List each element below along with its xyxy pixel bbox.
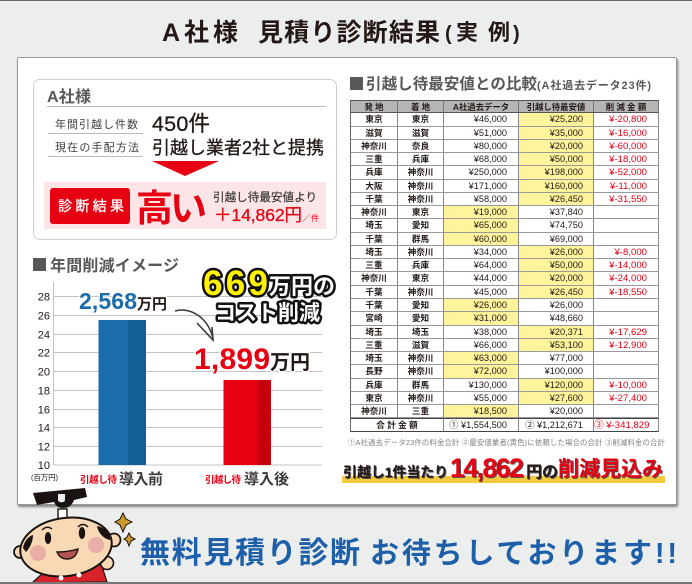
comparison table: ¥26,450 xyxy=(550,287,583,297)
comparison table: ¥66,000 xyxy=(474,340,507,350)
comparison table xyxy=(350,100,658,432)
comparison table: 千葉 xyxy=(365,300,383,310)
callout: cost reduction: コスト削減 xyxy=(215,301,320,325)
panel: A社様 client summary xyxy=(33,79,337,240)
savings per case headline: 円の xyxy=(526,464,558,481)
comparison table: 千葉 xyxy=(365,194,383,204)
title: ( xyxy=(445,23,452,45)
comparison table: ¥26,000 xyxy=(550,247,583,257)
comparison table: ¥198,000 xyxy=(545,167,583,177)
comparison table: ¥-11,000 xyxy=(610,181,647,192)
comparison table: 合 計 金 額 xyxy=(376,420,418,430)
comparison table: ¥38,000 xyxy=(474,327,507,337)
savings per case headline: 削減見込み xyxy=(558,457,663,481)
x label: before: 引越し待 xyxy=(80,474,117,486)
comparison table: ¥26,000 xyxy=(550,300,583,310)
comparison table: ¥-18,000 xyxy=(609,154,647,165)
callout: cost reduction xyxy=(203,264,335,325)
comparison table: 滋賀 xyxy=(412,128,429,138)
comparison table: ③ ¥-341,829 xyxy=(594,420,649,431)
comparison table: 千葉 xyxy=(365,287,383,297)
comparison table: ¥35,000 xyxy=(550,128,583,138)
comparison table: ¥44,000 xyxy=(474,273,507,283)
axis unit: (百万円) xyxy=(31,473,58,482)
comparison table: 三重 xyxy=(365,154,383,164)
comparison table: ¥77,000 xyxy=(550,353,583,363)
comparison table: ¥250,000 xyxy=(469,167,507,177)
comparison table: 神奈川 xyxy=(361,273,387,283)
comparison table: ¥60,000 xyxy=(474,234,507,244)
comparison table: ¥-20,800 xyxy=(609,114,647,125)
heading: comparison: 引越し待最安値との比較 xyxy=(366,74,537,93)
comparison table: 引越し待最安値 xyxy=(527,102,585,112)
comparison table: ¥74,750 xyxy=(550,220,583,230)
label: before amount xyxy=(79,288,167,314)
result badge: 診断結果 xyxy=(58,198,124,214)
comparison table: 神奈川 xyxy=(408,366,433,376)
per case unit: ／件 xyxy=(302,213,319,223)
comparison table: 神奈川 xyxy=(408,167,433,177)
comparison table: 神奈川 xyxy=(361,141,387,151)
comparison table: 神奈川 xyxy=(361,406,387,416)
comparison table: 埼玉 xyxy=(365,220,383,230)
comparison table: ¥46,000 xyxy=(474,114,507,124)
comparison table: ¥50,000 xyxy=(550,154,583,164)
callout: cost reduction: 万円の xyxy=(269,274,335,299)
comparison table: 群馬 xyxy=(412,380,429,390)
comparison table: 東京 xyxy=(412,207,429,217)
y axis labels: 26 xyxy=(38,310,50,322)
comparison table: 愛知 xyxy=(412,220,429,230)
top edge line xyxy=(0,0,692,1)
comparison table: ¥51,000 xyxy=(474,128,507,138)
result band xyxy=(44,182,326,229)
comparison table: ¥64,000 xyxy=(474,260,507,270)
comparison table: ¥160,000 xyxy=(545,181,583,191)
comparison table: 千葉 xyxy=(365,234,383,244)
comparison table: ¥34,000 xyxy=(474,247,507,257)
comparison table: ② ¥1,212,671 xyxy=(525,420,583,430)
savings per case headline: 14,862 xyxy=(450,453,524,483)
comparison table: 愛知 xyxy=(412,300,429,310)
x label: after: 導入後 xyxy=(244,470,289,488)
comparison table: 兵庫 xyxy=(412,154,429,164)
comparison table: 愛知 xyxy=(412,313,429,323)
comparison table: 三重 xyxy=(365,260,383,270)
comparison table: 削 減 金 額 xyxy=(606,102,646,112)
arrangement method label: 現在の手配方法 xyxy=(55,140,139,154)
y axis labels: 28 xyxy=(38,292,50,304)
comparison table: ¥27,600 xyxy=(550,393,583,403)
bottom call to action: 無料見積り診断 xyxy=(140,537,360,570)
comparison table: ① ¥1,554,500 xyxy=(449,420,507,430)
comparison table: ¥18,500 xyxy=(474,406,507,416)
result word: 高い: 高い xyxy=(136,188,207,229)
y axis labels: 24 xyxy=(38,330,50,342)
arrow: reduction xyxy=(175,310,213,340)
arrow: down to result xyxy=(152,161,219,176)
comparison table: ¥65,000 xyxy=(474,220,507,230)
comparison table: ¥-17,629 xyxy=(609,327,647,338)
comparison table: ¥55,000 xyxy=(474,393,507,403)
comparison table: A社過去データ xyxy=(453,102,509,112)
bottom call to action: お待ちしております!! xyxy=(370,537,677,570)
comparison table: ¥37,840 xyxy=(550,207,583,217)
comparison table: ¥-8,000 xyxy=(614,247,647,258)
comparison table: 埼玉 xyxy=(365,327,383,337)
y axis labels: 20 xyxy=(38,366,50,378)
y axis labels: 14 xyxy=(38,422,50,434)
label: before amount: 万円 xyxy=(137,296,167,313)
comparison table: ¥20,000 xyxy=(550,273,583,283)
comparison table: 三重 xyxy=(412,406,429,416)
comparison table: 奈良 xyxy=(412,141,429,151)
y axis labels xyxy=(38,292,50,472)
comparison table: ¥-16,000 xyxy=(609,128,647,139)
comparison table: 発 地 xyxy=(364,102,384,112)
annual moves value: 450件 xyxy=(152,112,210,136)
comparison table: ¥69,000 xyxy=(550,234,583,244)
comparison table: ¥72,000 xyxy=(474,366,507,376)
comparison table: ¥-10,000 xyxy=(609,380,647,391)
comparison table: ¥-18,550 xyxy=(609,287,647,298)
x label: before xyxy=(80,470,163,488)
comparison table: ¥58,000 xyxy=(474,194,507,204)
title: A社様 xyxy=(162,19,238,47)
y axis labels: 18 xyxy=(38,386,50,398)
comparison table: 神奈川 xyxy=(408,353,433,363)
arrangement method value: 引越し業者2社と提携 xyxy=(152,138,324,158)
comparison table: 神奈川 xyxy=(408,194,433,204)
comparison table: ¥20,000 xyxy=(550,141,583,151)
y axis labels: 16 xyxy=(38,404,50,416)
label: after amount: 万円 xyxy=(270,352,310,374)
comparison table: 東京 xyxy=(365,393,383,403)
comparison table: 兵庫 xyxy=(412,260,429,270)
comparison table: ¥120,000 xyxy=(545,380,583,390)
comparison table: ¥45,000 xyxy=(474,287,507,297)
comparison table: ¥63,000 xyxy=(474,353,507,363)
comparison table: ¥-60,000 xyxy=(609,141,647,152)
y axis labels: 12 xyxy=(38,442,50,454)
label: after amount: 1,899 xyxy=(194,343,270,376)
label: before amount: 2,568 xyxy=(79,288,137,314)
comparison table: 埼玉 xyxy=(365,353,383,363)
comparison table: 三重 xyxy=(365,340,383,350)
comparison table: ¥53,100 xyxy=(550,340,583,350)
panel: main white card xyxy=(17,57,677,505)
x label: after xyxy=(205,470,289,488)
comparison table: 群馬 xyxy=(412,234,429,244)
title: 実例 xyxy=(456,20,510,45)
comparison table: 神奈川 xyxy=(408,287,433,297)
y axis labels: 22 xyxy=(38,348,50,360)
comparison table: ¥20,371 xyxy=(550,327,583,337)
comparison table: ¥-12,900 xyxy=(609,340,647,351)
comparison table: ¥26,450 xyxy=(550,194,583,204)
comparison table: ¥25,200 xyxy=(550,114,583,124)
client name heading: A社様 xyxy=(47,87,91,106)
comparison table: 東京 xyxy=(412,273,429,283)
comparison table: ¥26,000 xyxy=(474,300,507,310)
comparison table: ¥50,000 xyxy=(550,260,583,270)
bar: after xyxy=(224,380,271,465)
comparison table: ¥-14,000 xyxy=(609,260,647,271)
comparison table: ¥19,000 xyxy=(474,207,507,217)
comparison table: 神奈川 xyxy=(408,393,433,403)
comparison table: ¥-31,550 xyxy=(609,194,647,205)
comparison table: ¥100,000 xyxy=(545,366,583,376)
label: after amount xyxy=(194,343,310,376)
comparison table: 宮崎 xyxy=(365,313,383,323)
bottom edge line xyxy=(0,582,692,584)
comparison table: 神奈川 xyxy=(361,207,387,217)
comparison table: 長野 xyxy=(365,366,383,376)
comparison table: 東京 xyxy=(412,114,429,124)
x label: before: 導入前 xyxy=(119,470,163,488)
comparison table: ¥171,000 xyxy=(469,181,507,191)
comparison table: ¥-24,000 xyxy=(609,273,647,284)
comparison table: 埼玉 xyxy=(365,247,383,257)
comparison table: 神奈川 xyxy=(408,247,433,257)
comparison table: ¥-27,400 xyxy=(609,393,647,404)
price difference: ＋14,862円 xyxy=(214,205,302,225)
annual moves label: 年間引越し件数 xyxy=(55,117,138,131)
table footnote: ①A社過去データ23件の料金合計 ②最安値業者(黄色)に依頼した場合の合計 ③削減料金の合計 xyxy=(348,438,666,447)
comparison table: 滋賀 xyxy=(412,340,429,350)
comparison table: 神奈川 xyxy=(408,181,433,191)
callout: cost reduction: 669 xyxy=(203,264,268,303)
y axis labels: 10 xyxy=(38,460,50,472)
comparison table: ¥31,000 xyxy=(474,313,507,323)
comparison table: 着 地 xyxy=(411,102,430,112)
title: 見積り診断結果 xyxy=(258,19,440,47)
comparison caption: 引越し待最安値より xyxy=(213,190,317,204)
heading: comparison: (A社過去データ23件) xyxy=(537,78,651,92)
comparison table: ¥68,000 xyxy=(474,154,507,164)
savings per case headline: 引越し1件当たり xyxy=(343,464,448,480)
title: ) xyxy=(513,23,520,45)
comparison table: ¥130,000 xyxy=(469,380,507,390)
result badge xyxy=(50,188,130,224)
comparison table: 大阪 xyxy=(365,181,383,191)
comparison table: 滋賀 xyxy=(365,128,383,138)
comparison table: 埼玉 xyxy=(412,327,429,337)
comparison table: 兵庫 xyxy=(365,167,383,177)
heading: annual savings: 年間削減イメージ xyxy=(50,256,179,275)
comparison table: 兵庫 xyxy=(365,380,383,390)
comparison table: 東京 xyxy=(365,114,383,124)
comparison table: ¥20,000 xyxy=(550,406,583,416)
comparison table: ¥80,000 xyxy=(474,141,507,151)
comparison table: ¥48,660 xyxy=(550,313,583,323)
bar: before xyxy=(98,320,146,465)
heading: comparison xyxy=(350,74,651,93)
x label: after: 引越し待 xyxy=(205,474,241,486)
title xyxy=(162,19,520,47)
comparison table: ¥-52,000 xyxy=(609,167,647,178)
